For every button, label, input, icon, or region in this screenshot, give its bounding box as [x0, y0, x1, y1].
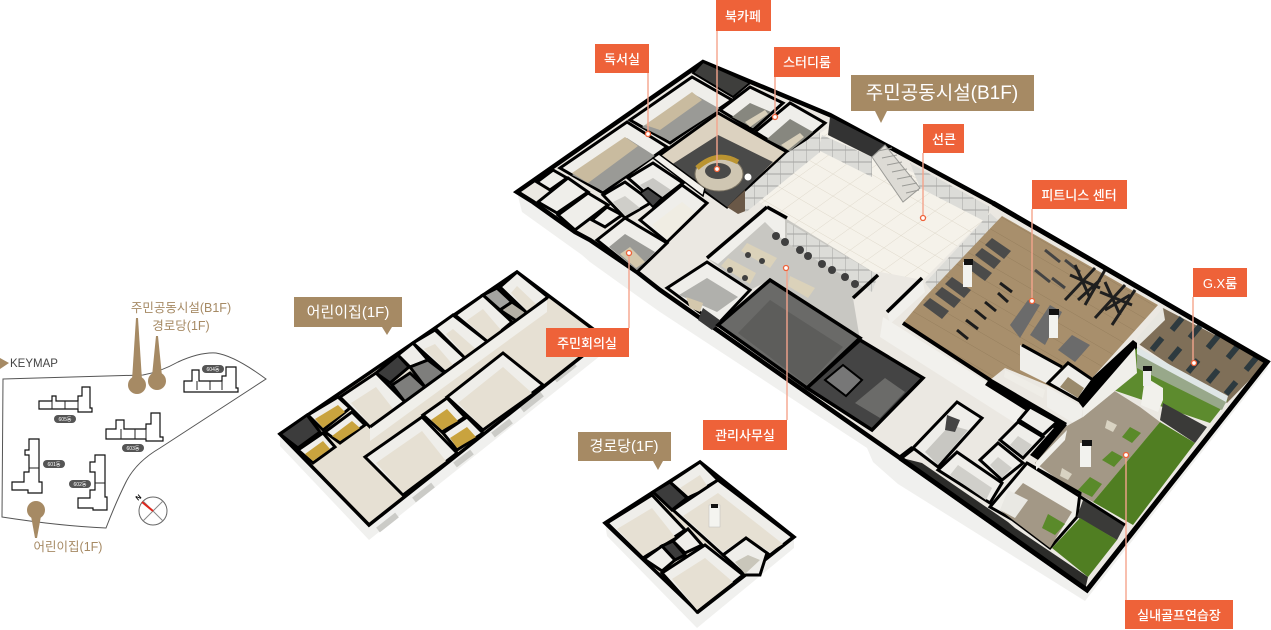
treadmills	[923, 238, 1011, 319]
floor plan: 경로당	[605, 462, 794, 628]
callout: 독서실	[595, 44, 650, 136]
small rooms left	[537, 170, 622, 230]
heading: 어린이집(1F): 어린이집(1F)	[307, 304, 389, 321]
heading: 경로당(1F): 경로당(1F)	[590, 438, 658, 455]
room: 실내골프연습장	[1035, 340, 1207, 525]
heading: 어린이집(1F)	[294, 297, 402, 335]
callout: 실내골프연습장: 실내골프연습장	[1137, 608, 1221, 623]
callout: 피트니스 센터	[1030, 180, 1127, 304]
dark room	[280, 415, 320, 448]
floor plan: 주민공동시설 B1F	[517, 62, 1268, 601]
restrooms	[603, 163, 707, 242]
callout: 실내골프연습장	[1124, 452, 1233, 629]
exterior wall	[605, 523, 794, 628]
callout: 주민회의실	[546, 250, 632, 357]
building 601: 601동	[48, 462, 61, 468]
golf screen	[1113, 347, 1228, 423]
room: 스터디룸 2	[755, 103, 825, 153]
callout: 피트니스 센터: 피트니스 센터	[1041, 188, 1117, 203]
dark stairs	[807, 340, 923, 430]
floor outline	[605, 462, 794, 612]
floor outline	[280, 272, 605, 525]
chairs	[1060, 420, 1117, 480]
gym machines	[1010, 300, 1090, 362]
floor outline	[517, 62, 1267, 590]
callout: 관리사무실: 관리사무실	[715, 428, 775, 443]
callout: 관리사무실	[703, 266, 788, 450]
keymap heading: KEYMAP	[10, 358, 58, 370]
exterior wall	[280, 338, 605, 540]
keymap	[0, 301, 266, 554]
heading: 주민공동시설(B1F)	[851, 75, 1034, 123]
callout: 북카페	[714, 0, 771, 172]
callout: G.X룸	[1192, 268, 1247, 366]
white wall by fitness	[887, 278, 925, 324]
marker: 어린이집	[27, 501, 45, 538]
pillars	[963, 259, 1059, 338]
window strip	[378, 364, 575, 530]
hall: 선큰	[745, 117, 1000, 324]
room: 독서실 lower	[560, 122, 667, 193]
site outline	[2, 353, 266, 528]
chairs	[727, 232, 859, 288]
floor plan: 어린이집	[280, 272, 605, 540]
black wall and white wall	[985, 378, 1067, 432]
compass: N	[135, 494, 143, 502]
large lower rooms	[365, 353, 543, 495]
hall upper wall	[828, 117, 885, 157]
room: 북카페	[653, 113, 787, 214]
room: 독서실 upper	[630, 77, 732, 143]
callout: 선큰	[920, 124, 964, 220]
building 604	[184, 365, 238, 392]
mats	[1078, 427, 1141, 497]
bikes	[957, 283, 1012, 339]
thick wall	[1077, 340, 1137, 408]
heading: 주민공동시설(B1F): 주민공동시설(B1F)	[866, 82, 1018, 104]
glass wall: book cafe side	[745, 132, 820, 213]
callout: 독서실: 독서실	[604, 52, 640, 67]
dark room	[718, 280, 860, 388]
yellow rooms	[298, 397, 365, 463]
marker: 경로당	[148, 336, 166, 390]
reception and rooms	[1004, 370, 1045, 398]
room: G.X룸	[1137, 308, 1267, 403]
room: 관리사무실	[707, 207, 878, 340]
callout: 선큰: 선큰	[932, 132, 956, 147]
building 605	[39, 387, 92, 423]
callout: 스터디룸	[772, 47, 840, 120]
dark storage	[693, 62, 750, 97]
outline accent	[900, 203, 1267, 590]
compass	[135, 494, 167, 525]
room: 스터디룸 1	[720, 87, 783, 130]
building 605: 605동	[59, 417, 72, 423]
keymap label: 어린이집: 어린이집(1F)	[34, 540, 102, 554]
lower service rooms	[913, 402, 1067, 503]
stair	[872, 145, 920, 202]
golf green	[1093, 422, 1195, 525]
keymap label: 주민공동시설: 주민공동시설(B1F)	[131, 301, 231, 315]
building 604: 604동	[207, 367, 220, 373]
keymap label: 경로당: 경로당(1F)	[152, 319, 210, 333]
corridor wall	[370, 298, 547, 441]
marker: 주민공동시설	[128, 318, 146, 394]
building 603	[106, 413, 163, 452]
corridor wall	[880, 317, 1023, 425]
rooms	[607, 462, 793, 612]
desks	[721, 243, 815, 298]
weight racks	[1065, 265, 1135, 325]
callout: G.X룸: G.X룸	[1203, 276, 1237, 291]
callout: 주민회의실: 주민회의실	[557, 336, 617, 351]
heading: 경로당(1F)	[578, 432, 671, 470]
upper bikes	[1035, 250, 1080, 288]
rooms	[340, 272, 548, 427]
room: office side	[667, 262, 750, 330]
building 602: 602동	[74, 482, 87, 488]
building 602	[69, 455, 107, 510]
glass wall: fitness side	[925, 213, 1000, 295]
lounge	[990, 463, 1125, 577]
room: 주민회의실	[597, 218, 667, 272]
exterior wall	[517, 192, 1268, 601]
room: 피트니스 센터	[903, 216, 1158, 432]
callout: 북카페: 북카페	[725, 9, 761, 24]
building 603: 603동	[127, 446, 140, 452]
toilets	[423, 398, 483, 450]
callout: 스터디룸: 스터디룸	[783, 55, 831, 70]
building 601	[12, 439, 65, 493]
dark wall	[1160, 403, 1207, 443]
bottom dark band	[902, 458, 1088, 590]
